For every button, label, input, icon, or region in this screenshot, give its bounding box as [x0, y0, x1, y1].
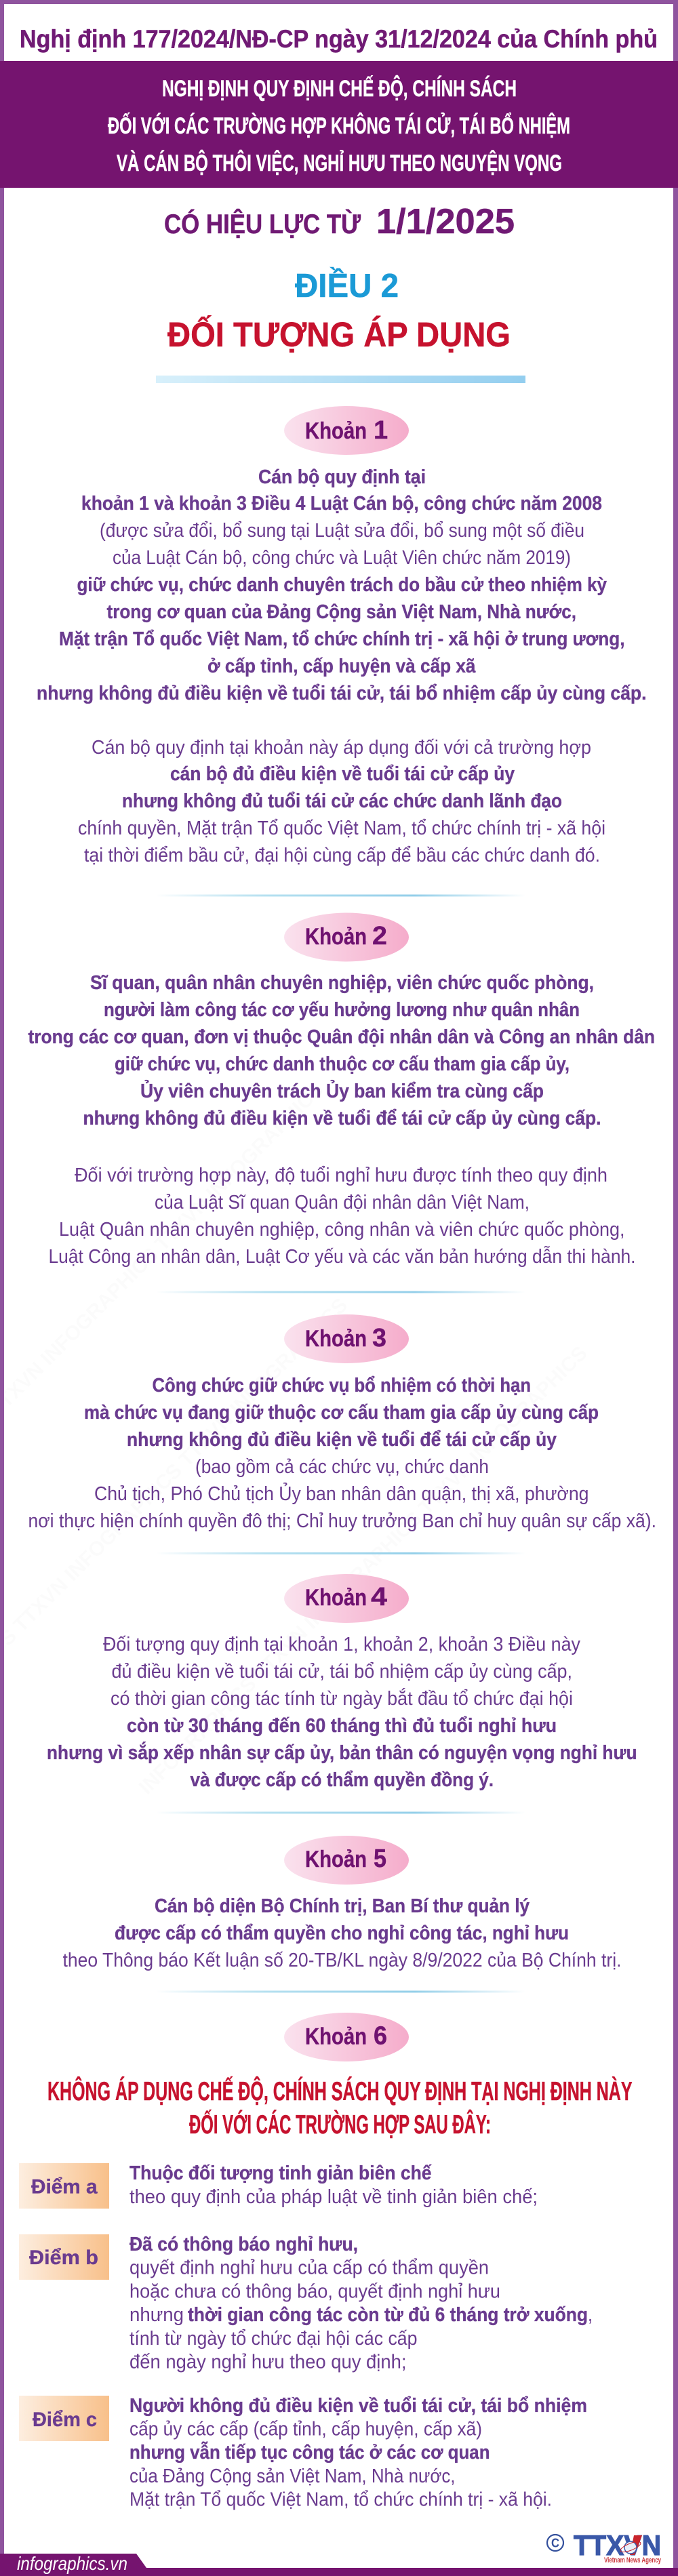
text block: Khoản 2: của Luật Sĩ quan Quân đội nhân dân Việt Nam,: [155, 1192, 530, 1213]
article title: ĐỐI TƯỢNG ÁP DỤNG: [167, 315, 511, 354]
text block: Khoản 5: theo Thông báo Kết luận số 20-TB/KL ngày 8/9/2022 của Bộ Chính trị.: [62, 1950, 621, 1971]
text block: Khoản 1: giữ chức vụ, chức danh chuyên trách do bầu cử theo nhiệm kỳ: [77, 574, 607, 596]
text block: Khoản 1: Cán bộ quy định tại: [258, 466, 426, 488]
badge: Khoản 5: Khoản: [305, 1847, 367, 1872]
text block: Khoản 2: giữ chức vụ, chức danh thuộc cơ cấu tham gia cấp ủy,: [115, 1053, 570, 1075]
label: Điểm a: [19, 2163, 109, 2209]
label: Điểm c: Điểm c: [33, 2409, 97, 2431]
text: Điểm b: nhưng: [129, 2304, 184, 2326]
logo: TTXVN: TTXVN: [574, 2529, 661, 2561]
text: Điểm b: đến ngày nghỉ hưu theo quy định;: [129, 2351, 407, 2373]
text block: Khoản 1: ở cấp tỉnh, cấp huyện và cấp xã: [207, 656, 476, 677]
text block: Khoản 2: người làm công tác cơ yếu hưởng lương như quân nhân: [104, 999, 580, 1021]
text block: Khoản 3: Công chức giữ chức vụ bổ nhiệm có thời hạn: [152, 1375, 531, 1396]
footer band: infographics.vn: [17, 2553, 127, 2574]
text block: Khoản 5: [62, 1895, 621, 1971]
text block: Khoản 4: [47, 1634, 637, 1791]
effective date: [164, 202, 515, 241]
text block: Khoản 1: Mặt trận Tổ quốc Việt Nam, tổ chức chính trị - xã hội ở trung ương,: [59, 628, 625, 650]
label: Điểm b: [19, 2234, 109, 2280]
text block: Khoản 4: Đối tượng quy định tại khoản 1, khoản 2, khoản 3 Điều này: [103, 1634, 580, 1655]
badge: Khoản 2: [284, 912, 409, 961]
badge: Khoản 1: 1: [374, 416, 388, 445]
badge: Khoản 4: Khoản: [305, 1585, 367, 1611]
label: Điểm a: Điểm a: [31, 2176, 98, 2198]
text block: Khoản 2: Ủy viên chuyên trách Ủy ban kiểm tra cùng cấp: [140, 1079, 544, 1102]
badge: Khoản 3: Khoản: [305, 1326, 367, 1352]
text block: Khoản 5: Cán bộ diện Bộ Chính trị, Ban Bí thư quản lý: [155, 1895, 530, 1917]
badge: Khoản 5: [284, 1836, 409, 1885]
text block: Khoản 4: còn từ 30 tháng đến 60 tháng thì đủ tuổi nghỉ hưu: [127, 1715, 557, 1737]
section: Khoản 2: [28, 912, 655, 1268]
item: Điểm c: [19, 2395, 587, 2511]
red exclusion heading: [47, 2076, 632, 2139]
section: Khoản 1: [37, 406, 647, 866]
text block: Khoản 3: mà chức vụ đang giữ thuộc cơ cấu tham gia cấp ủy cùng cấp: [84, 1402, 599, 1424]
text: Điểm c: [129, 2395, 587, 2511]
red exclusion heading: ĐỐI VỚI CÁC TRƯỜNG HỢP SAU ĐÂY:: [189, 2109, 491, 2139]
text: Điểm b: tính từ ngày tổ chức đại hội các cấp: [129, 2328, 418, 2350]
badge: Khoản 5: 5: [374, 1845, 386, 1873]
section: Khoản 5: [62, 1836, 621, 1971]
text: Điểm b: hoặc chưa có thông báo, quyết định nghỉ hưu: [129, 2280, 500, 2302]
badge: Khoản 1: Khoản: [305, 418, 367, 444]
text block: Khoản 3: nhưng không đủ điều kiện về tuổi để tái cử cấp ủy: [127, 1429, 557, 1451]
text: Điểm b: [129, 2234, 593, 2373]
effective date: 1/1/2025: [376, 202, 515, 241]
text: Điểm a: [129, 2162, 538, 2208]
text: Điểm c: của Đảng Cộng sản Việt Nam, Nhà nước,: [129, 2466, 456, 2487]
title band: [0, 61, 678, 188]
text block: Khoản 2: Luật Quân nhân chuyên nghiệp, công nhân và viên chức quốc phòng,: [59, 1219, 625, 1241]
text block: Khoản 1: của Luật Cán bộ, công chức và Luật Viên chức năm 2019): [113, 547, 571, 569]
effective date: CÓ HIỆU LỰC TỪ: [164, 208, 361, 239]
label: Điểm c: [19, 2396, 109, 2441]
text block: Khoản 2: nhưng không đủ điều kiện về tuổi để tái cử cấp ủy cùng cấp.: [83, 1108, 601, 1129]
text block: Khoản 4: đủ điều kiện về tuổi tái cử, tái bổ nhiệm cấp ủy cùng cấp,: [111, 1661, 572, 1683]
text block: Khoản 3: (bao gồm cả các chức vụ, chức danh: [195, 1456, 489, 1478]
logo: TTXVN: C: [551, 2537, 559, 2550]
badge: Khoản 6: [284, 2013, 409, 2061]
item: Điểm a: [19, 2162, 538, 2209]
badge: Khoản 6: 6: [374, 2021, 387, 2050]
text block: Khoản 1: chính quyền, Mặt trận Tổ quốc Việt Nam, tổ chức chính trị - xã hội: [78, 818, 605, 839]
badge: Khoản 3: [284, 1314, 409, 1363]
text block: Khoản 1: nhưng không đủ tuổi tái cử các chức danh lãnh đạo: [122, 790, 562, 812]
badge: Khoản 2: Khoản: [305, 924, 367, 950]
badge: Khoản 1: [284, 406, 409, 455]
section: Khoản 4: [47, 1574, 637, 1791]
badge: Khoản 4: 4: [371, 1583, 387, 1611]
logo: TTXVN: [547, 2529, 662, 2564]
text block: Khoản 3: [28, 1375, 656, 1532]
section: Khoản 6: [19, 2013, 632, 2511]
footer band: [0, 2553, 678, 2576]
text block: Khoản 1: trong cơ quan của Đảng Cộng sản Việt Nam, Nhà nước,: [107, 601, 576, 623]
text block: Khoản 1: Cán bộ quy định tại khoản này áp dụng đối với cả trường hợp: [92, 737, 591, 759]
text block: Khoản 1: [37, 466, 647, 866]
text block: Khoản 4: và được cấp có thẩm quyền đồng ý.: [190, 1769, 494, 1791]
text: Điểm c: Người không đủ điều kiện về tuổi tái cử, tái bổ nhiệm: [129, 2395, 587, 2417]
badge: Khoản 6: Khoản: [305, 2024, 367, 2050]
text block: Khoản 5: được cấp có thẩm quyền cho nghỉ công tác, nghỉ hưu: [115, 1923, 569, 1944]
text: Điểm c: nhưng vẫn tiếp tục công tác ở các cơ quan: [129, 2440, 490, 2463]
text: Điểm b: Đã có thông báo nghỉ hưu,: [129, 2234, 358, 2255]
badge: Khoản 3: 3: [372, 1324, 386, 1352]
text block: Khoản 2: Sĩ quan, quân nhân chuyên nghiệp, viên chức quốc phòng,: [90, 972, 594, 994]
article number: ĐIỀU 2: [295, 268, 399, 304]
text: Điểm b: quyết định nghỉ hưu của cấp có thẩm quyền: [129, 2257, 489, 2279]
text block: Khoản 2: Đối với trường hợp này, độ tuổi nghỉ hưu được tính theo quy định: [75, 1165, 607, 1186]
title band: NGHỊ ĐỊNH QUY ĐỊNH CHẾ ĐỘ, CHÍNH SÁCH: [162, 75, 517, 102]
label: Điểm b: Điểm b: [29, 2247, 98, 2269]
text: Điểm a: Thuộc đối tượng tinh giản biên chế: [129, 2162, 432, 2184]
text block: Khoản 1: tại thời điểm bầu cử, đại hội cùng cấp để bầu các chức danh đó.: [84, 845, 600, 866]
text: Điểm c: cấp ủy các cấp (cấp tỉnh, cấp huyện, cấp xã): [129, 2419, 482, 2440]
text: Điểm a: theo quy định của pháp luật về tinh giản biên chế;: [129, 2186, 538, 2208]
text: Điểm c: Mặt trận Tổ quốc Việt Nam, tổ chức chính trị - xã hội.: [129, 2489, 552, 2511]
text block: Khoản 1: khoản 1 và khoản 3 Điều 4 Luật Cán bộ, công chức năm 2008: [81, 493, 602, 515]
section: Khoản 3: [28, 1314, 656, 1532]
badge: Khoản 4: [284, 1574, 409, 1623]
text block: Khoản 2: Luật Công an nhân dân, Luật Cơ yếu và các văn bản hướng dẫn thi hành.: [49, 1245, 636, 1268]
text block: Khoản 1: cán bộ đủ điều kiện về tuổi tái cử cấp ủy: [170, 763, 515, 785]
text: Điểm b: thời gian công tác còn từ đủ 6 tháng trở xuống: [188, 2304, 588, 2326]
item: Điểm b: [19, 2234, 593, 2373]
badge: Khoản 2: 2: [372, 922, 387, 950]
text block: Khoản 2: [28, 972, 655, 1268]
text: Điểm b: ,: [588, 2304, 593, 2326]
text block: Khoản 3: Chủ tịch, Phó Chủ tịch Ủy ban nhân dân quận, thị xã, phường: [94, 1482, 589, 1505]
text block: Khoản 1: (được sửa đổi, bổ sung tại Luật sửa đổi, bổ sung một số điều: [100, 520, 584, 542]
text block: Khoản 4: có thời gian công tác tính từ ngày bắt đầu tổ chức đại hội: [111, 1687, 573, 1710]
